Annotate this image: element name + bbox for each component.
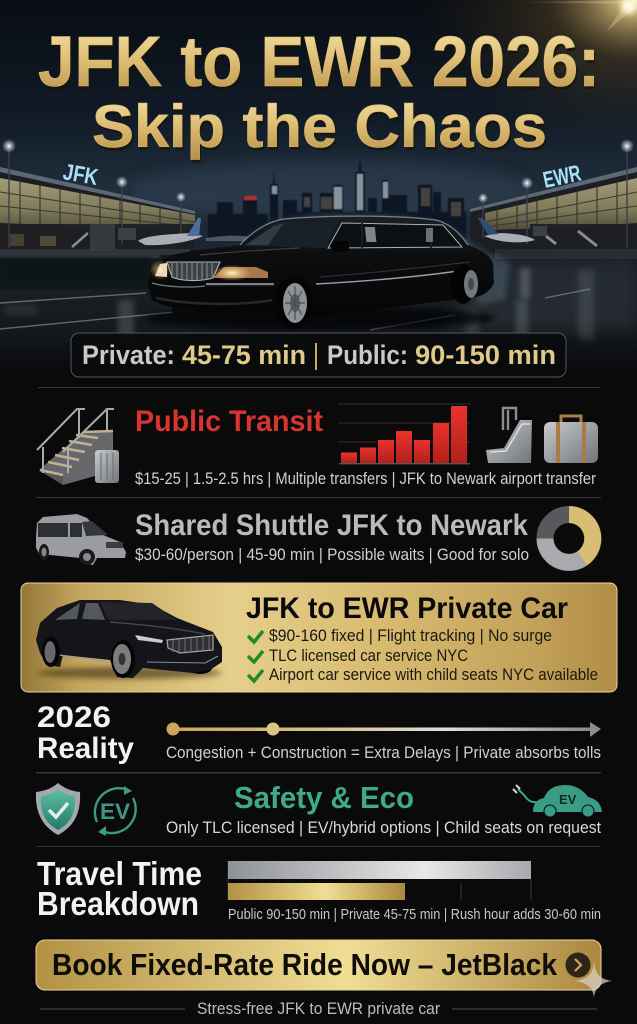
hero scene: night airport (0, 0, 637, 387)
time comparison pill: Private: (82, 340, 175, 370)
call to action button: Book Fixed-Rate Ride Now – JetBlack (52, 947, 558, 982)
check list: $90-160 fixed | Flight tracking | No surge (269, 626, 552, 645)
heading: travel time breakdown: Breakdown (37, 885, 199, 922)
lamp posts (2, 139, 634, 248)
icon: EV car with plug (513, 785, 602, 817)
title: Skip the Chaos (92, 93, 547, 160)
icon: stairs and suitcase (37, 409, 119, 485)
footer line: Stress-free JFK to EWR private car (197, 999, 440, 1018)
grille (167, 262, 220, 281)
heading: safety and eco: Safety & Eco (234, 780, 414, 815)
bar chart: red bars (338, 404, 470, 464)
icon: shuttle van (36, 514, 126, 565)
panel: private car (21, 583, 617, 692)
icon: EV cycle (95, 786, 136, 836)
section: travel time breakdown (37, 855, 601, 923)
icon: EV car with plug: EV (559, 792, 577, 807)
icon: suitcase (544, 416, 598, 463)
section: public transit (37, 404, 598, 488)
wet road and reflections (0, 249, 637, 342)
icon: escalator (486, 408, 532, 463)
timeline arrow (166, 722, 601, 737)
skyline (208, 157, 466, 240)
section: safety and eco (36, 780, 602, 837)
sign: EWR: EWR (541, 160, 583, 193)
sparkle (575, 961, 612, 998)
title: JFK to EWR 2026: (38, 23, 600, 102)
limousine (145, 214, 510, 330)
planes (138, 218, 535, 245)
heading: 2026 reality: Reality (37, 732, 134, 765)
title: Skip the Chaos (94, 96, 548, 163)
time comparison pill: 90-150 min (415, 340, 556, 370)
call to action button (36, 940, 612, 998)
bar chart: travel time (228, 861, 531, 900)
section: 2026 reality (37, 701, 601, 765)
check list: TLC licensed car service NYC (269, 646, 468, 665)
details: safety and eco: Only TLC licensed | EV/hybrid options | Child seats on request (166, 818, 601, 837)
heading: 2026 reality: 2026 (37, 701, 111, 734)
donut chart (545, 514, 593, 562)
section: shared shuttle (36, 509, 593, 565)
terminal EWR (470, 167, 637, 250)
time comparison pill (71, 333, 566, 377)
sedan car image (36, 600, 222, 679)
heading: private car: JFK to EWR Private Car (246, 592, 568, 625)
details: 2026 reality: Congestion + Construction = Extra Delays | Private absorbs tolls (166, 743, 601, 762)
check list: Airport car service with child seats NYC available (269, 665, 598, 684)
title: JFK to EWR 2026: (40, 26, 602, 105)
sign: JFK: JFK (61, 158, 100, 190)
wheels (274, 277, 312, 329)
heading: travel time breakdown: Travel Time (37, 855, 202, 892)
details: shared shuttle: $30-60/person | 45-90 min | Possible waits | Good for solo (135, 545, 529, 564)
icon: shield (36, 783, 80, 835)
time comparison pill: 45-75 min (182, 340, 306, 370)
heading: shared shuttle: Shared Shuttle JFK to Newark (135, 509, 528, 542)
time comparison pill: Public: (327, 340, 408, 370)
icon: EV cycle: EV (100, 799, 130, 824)
check list (248, 626, 598, 684)
terminal JFK (0, 167, 195, 250)
headlights (155, 263, 167, 277)
title (38, 23, 602, 163)
heading: public transit: Public Transit (135, 405, 323, 438)
